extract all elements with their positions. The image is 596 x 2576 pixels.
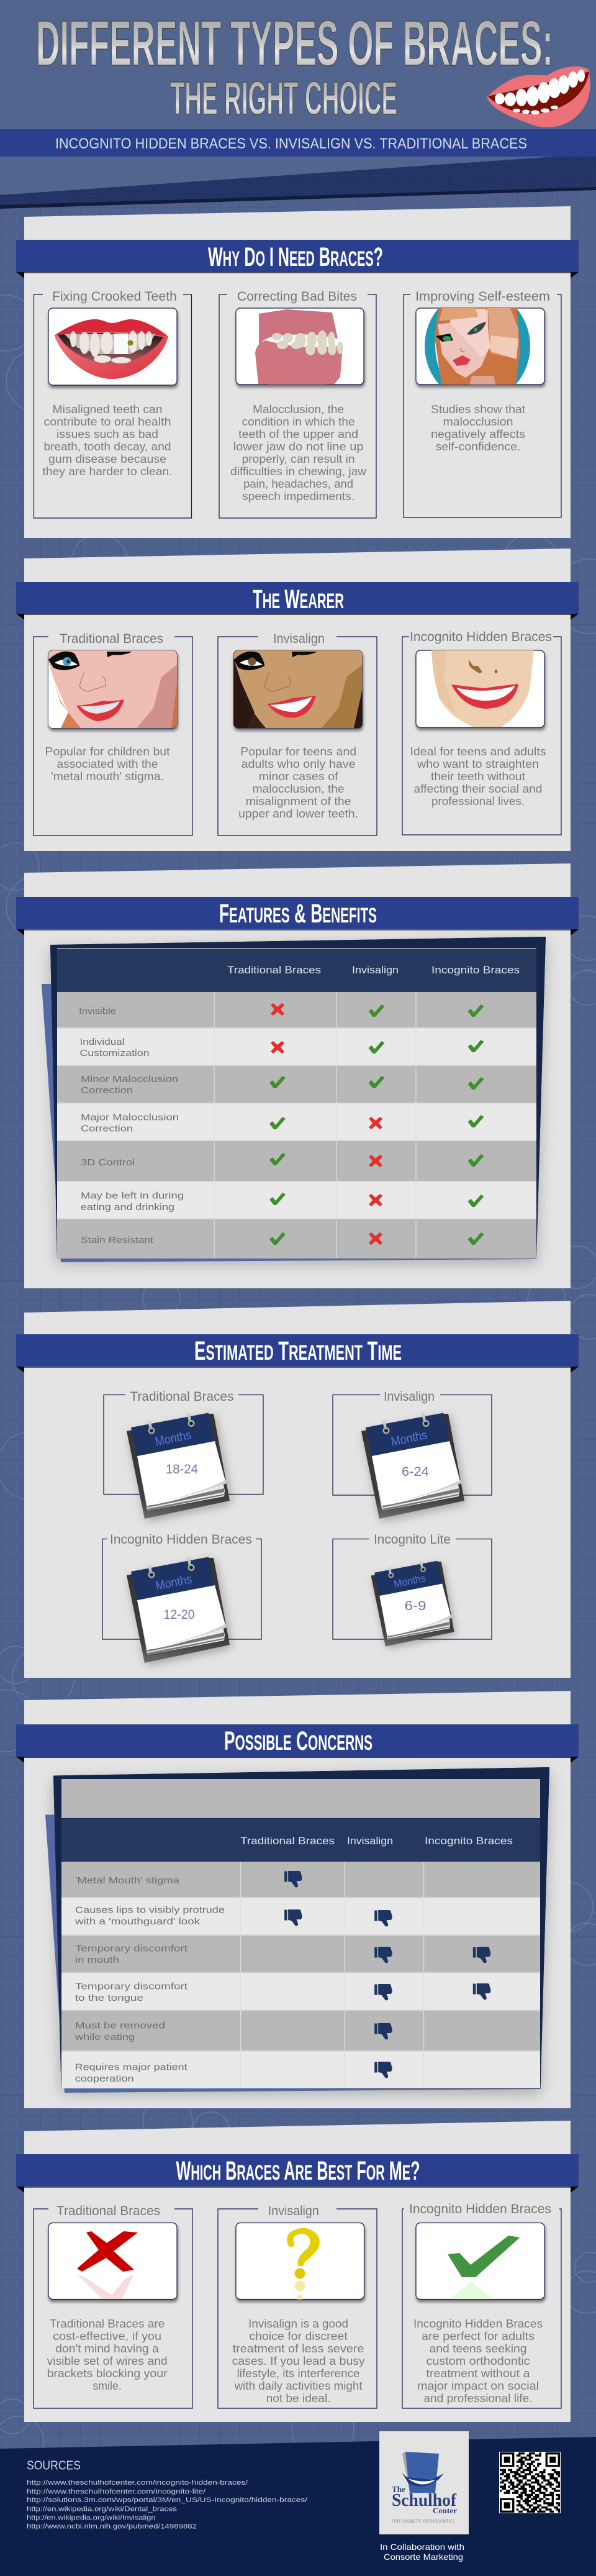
icon: yellow question mark: [287, 2228, 320, 2300]
timeframe: incognito hidden braces: 12-20: [164, 1608, 195, 1622]
title: [36, 7, 553, 124]
comparison table: concerns: Must be removed: [75, 2021, 165, 2031]
recommendation: traditional braces: [34, 2204, 192, 2408]
logo: the schulhof center: The: [392, 2485, 405, 2495]
logo: the schulhof center: FOR COSMETIC ORTHODONTICS: [392, 2518, 455, 2524]
card: fixing crooked teeth: issues such as bad: [56, 428, 158, 440]
comparison table: features: Traditional Braces: [227, 964, 321, 976]
comparison table: features: [42, 937, 546, 1262]
card: traditional braces wearer: 'metal mouth' stigma.: [51, 770, 164, 783]
card: incognito hidden braces wearer: professional lives.: [431, 795, 525, 808]
card: improving self-esteem: Improving Self-esteem: [415, 289, 550, 304]
card: incognito hidden braces wearer: Ideal for teens and adults: [410, 745, 546, 758]
heading ribbon: estimated treatment time: ESTIMATED TREATMENT TIME: [194, 1336, 402, 1366]
card: fixing crooked teeth: they are harder to clean.: [42, 465, 173, 478]
card: correcting bad bites: properly, can result in: [242, 453, 355, 465]
card: invisalign wearer: misalignment of the: [246, 795, 351, 808]
logo: the schulhof center: [379, 2431, 469, 2534]
card: traditional braces wearer: Popular for children but: [45, 745, 170, 758]
heading ribbon: why do I need braces: [16, 240, 579, 278]
comparison table: features: Correction: [81, 1123, 133, 1134]
card: incognito hidden braces wearer: who want to straighten: [417, 758, 539, 770]
sources: http://www.theschulhofcenter.com/incognito-hidden-braces/: [27, 2479, 248, 2487]
sources: http://solutions.3m.com/wps/portal/3M/en_US/US-Incognito/hidden-braces/: [27, 2496, 308, 2504]
comparison table: features: Correction: [81, 1085, 133, 1096]
sources: http://www.theschulhofcenter.com/incognito-lite/: [27, 2488, 206, 2496]
timeframe: incognito lite: Months: [393, 1572, 427, 1590]
icon: green check: [448, 2236, 520, 2299]
illustration: woman with metal braces: [48, 650, 177, 728]
subtitle band: INCOGNITO HIDDEN BRACES VS. INVISALIGN VS. TRADITIONAL BRACES: [55, 135, 527, 152]
comparison table: concerns: Causes lips to visibly protrude: [75, 1905, 225, 1916]
timeframe: incognito hidden braces: Incognito Hidden Braces: [110, 1532, 252, 1547]
card: invisalign wearer: Popular for teens and: [240, 745, 356, 758]
recommendation: incognito hidden braces: are perfect for adults: [422, 2330, 535, 2342]
recommendation: traditional braces: brackets blocking your: [47, 2367, 168, 2380]
comparison table: concerns: to the tongue: [75, 1993, 143, 2003]
heading ribbon: possible concerns: [16, 1724, 579, 1763]
card: improving self-esteem: negatively affects: [431, 428, 525, 440]
card: correcting bad bites: lower jaw do not line up: [233, 440, 364, 453]
heading ribbon: why do I need braces: WHY DO I NEED BRACES?: [208, 242, 383, 272]
sources: SOURCES: [27, 2459, 81, 2472]
recommendation: traditional braces: cost-effective, if you: [53, 2330, 161, 2342]
card: invisalign wearer: adults who only have: [242, 758, 356, 770]
card: improving self-esteem: Studies show that: [431, 403, 525, 416]
card: improving self-esteem: self-confidence.: [436, 440, 520, 453]
panel: features and benefits: [16, 863, 579, 1288]
timeframe: traditional braces: [104, 1390, 263, 1519]
recommendation: incognito hidden braces: and teens seeking: [430, 2342, 526, 2355]
timeframe: traditional braces: Months: [154, 1428, 192, 1449]
comparison table: features: 3D Control: [81, 1157, 135, 1168]
card: improving self-esteem: [404, 289, 561, 517]
card: fixing crooked teeth: Misaligned teeth can: [52, 403, 163, 416]
subtitle band: [0, 129, 596, 157]
timeframe: incognito lite: Incognito Lite: [374, 1532, 451, 1547]
recommendation: incognito hidden braces: and professional life.: [423, 2392, 533, 2405]
heading ribbon: features and benefits: [16, 897, 579, 935]
timeframe: invisalign: Invisalign: [384, 1390, 435, 1404]
illustration: lips with crooked teeth: [55, 319, 168, 379]
comparison table: concerns: cooperation: [75, 2073, 134, 2084]
comparison table: features: Individual: [79, 1037, 124, 1047]
comparison table: features: Minor Malocclusion: [81, 1074, 178, 1085]
card: invisalign wearer: Invisalign: [273, 632, 325, 646]
card: improving self-esteem: malocclusion: [443, 416, 513, 428]
comparison table: concerns: 'Metal Mouth' stigma: [75, 1875, 180, 1886]
panel: which braces are best for me: [16, 2121, 579, 2422]
recommendation: incognito hidden braces: custom orthodontic: [426, 2355, 530, 2367]
card: fixing crooked teeth: gum disease because: [48, 453, 166, 465]
recommendation: traditional braces: Traditional Braces are: [50, 2318, 165, 2330]
sources: [27, 2459, 308, 2531]
comparison table: concerns: in mouth: [75, 1955, 119, 1965]
footer background: [0, 2437, 596, 2576]
card: incognito hidden braces wearer: [402, 630, 561, 835]
collaboration credit: [380, 2542, 464, 2562]
comparison table: features: Customization: [79, 1048, 149, 1058]
card: correcting bad bites: pain, headaches, and: [243, 478, 353, 490]
recommendation: invisalign: not be ideal.: [266, 2392, 331, 2405]
illustration: woman looking in mirror: [425, 308, 530, 385]
comparison table: concerns: Incognito Braces: [425, 1835, 513, 1847]
panel: possible concerns: [16, 1691, 579, 2108]
card: invisalign wearer: [218, 632, 377, 835]
recommendation: invisalign: choice for discreet: [249, 2330, 348, 2342]
comparison table: concerns: Temporary discomfort: [75, 1943, 188, 1954]
comparison table: concerns: Invisalign: [347, 1835, 393, 1847]
logo: the schulhof center: Center: [433, 2506, 457, 2515]
icon: smiling mouth: [487, 66, 590, 127]
recommendation: incognito hidden braces: Incognito Hidden Braces: [413, 2318, 543, 2330]
timeframe: incognito hidden braces: [102, 1532, 261, 1663]
heading ribbon: features and benefits: FEATURES & BENEFITS: [219, 899, 377, 929]
recommendation: traditional braces: visible set of wires and: [47, 2355, 168, 2367]
card: correcting bad bites: [219, 289, 376, 518]
recommendation: incognito hidden braces: [402, 2202, 561, 2408]
timeframe: incognito lite: [333, 1532, 492, 1647]
sources: http://www.ncbi.nlm.nih.gov/pubmed/14989882: [27, 2523, 197, 2531]
card: invisalign wearer: malocclusion, the: [253, 783, 345, 795]
card: incognito hidden braces wearer: Incognito Hidden Braces: [410, 630, 552, 644]
recommendation: invisalign: Invisalign: [268, 2204, 319, 2218]
card: fixing crooked teeth: contribute to oral health: [43, 416, 171, 428]
timeframe: traditional braces: 18-24: [166, 1462, 198, 1477]
comparison table: concerns: Requires major patient: [75, 2062, 188, 2072]
comparison table: features: Invisalign: [352, 964, 399, 976]
heading ribbon: which braces are best: [16, 2154, 579, 2193]
card: correcting bad bites: Correcting Bad Bites: [237, 289, 357, 304]
recommendation: incognito hidden braces: treatment without a: [426, 2367, 531, 2380]
sources: http://en.wikipedia.org/wiki/Dental_braces: [27, 2506, 178, 2513]
illustration: dental model with malocclusion: [255, 309, 343, 385]
heading ribbon: which braces are best: WHICH BRACES ARE BEST FOR ME?: [176, 2156, 420, 2186]
illustration: smile with hidden braces: [431, 650, 534, 727]
logo: the schulhof center: Schulhof: [392, 2490, 456, 2510]
panel: the wearer: [16, 548, 579, 851]
comparison table: features: Stain Resistant: [81, 1235, 154, 1245]
comparison table: features: May be left in during: [81, 1190, 184, 1201]
recommendation: invisalign: cases. If you lead a busy: [232, 2355, 365, 2367]
collaboration credit: In Collaboration with: [380, 2542, 464, 2552]
recommendation: invisalign: Invisalign is a good: [248, 2318, 348, 2330]
recommendation: traditional braces: don't mind having a: [55, 2342, 160, 2355]
comparison table: concerns: Traditional Braces: [240, 1835, 335, 1847]
card: invisalign wearer: upper and lower teeth.: [238, 808, 358, 820]
timeframe: invisalign: [333, 1390, 492, 1519]
comparison table: features: eating and drinking: [81, 1202, 174, 1213]
comparison table: features: Invisible: [79, 1006, 116, 1016]
recommendation: invisalign: lifestyle, its interference: [237, 2367, 360, 2380]
heading ribbon: estimated treatment time: [16, 1334, 579, 1373]
recommendation: traditional braces: Traditional Braces: [56, 2204, 160, 2218]
card: fixing crooked teeth: Fixing Crooked Teeth: [52, 289, 177, 304]
timeframe: traditional braces: Traditional Braces: [130, 1390, 233, 1404]
comparison table: concerns: with a 'mouthguard' look: [74, 1916, 201, 1927]
card: incognito hidden braces wearer: their teeth without: [431, 770, 525, 783]
timeframe: invisalign: Months: [390, 1428, 428, 1449]
illustration: woman with clear aligners: [233, 650, 363, 728]
card: traditional braces wearer: Traditional Braces: [60, 632, 163, 646]
card: traditional braces wearer: [34, 632, 192, 835]
recommendation: invisalign: with daily activities might: [234, 2380, 363, 2392]
recommendation: incognito hidden braces: Incognito Hidden Braces: [409, 2202, 551, 2216]
card: fixing crooked teeth: [34, 289, 191, 518]
QR code: [499, 2452, 561, 2513]
card: correcting bad bites: speech impediments.: [242, 490, 354, 503]
icon: red cross: [77, 2231, 138, 2299]
timeframe: incognito hidden braces: Months: [155, 1572, 193, 1593]
timeframe: invisalign: 6-24: [402, 1465, 429, 1479]
comparison table: features: Major Malocclusion: [81, 1112, 179, 1123]
card: correcting bad bites: condition in which the: [242, 416, 355, 428]
comparison table: concerns: Temporary discomfort: [75, 1982, 188, 1992]
collaboration credit: Consorte Marketing: [384, 2552, 463, 2562]
recommendation: traditional braces: smile.: [93, 2380, 122, 2392]
sources: http://en.wikipedia.org/wiki/Invisalign: [27, 2515, 155, 2522]
heading ribbon: possible concerns: POSSIBLE CONCERNS: [224, 1726, 372, 1756]
card: incognito hidden braces wearer: affecting their social and: [413, 783, 543, 795]
card: fixing crooked teeth: breath, tooth decay, and: [43, 440, 171, 453]
recommendation: incognito hidden braces: major impact on social: [417, 2380, 539, 2392]
card: correcting bad bites: difficulties in chewing, jaw: [230, 465, 367, 478]
panel: estimated treatment time: [16, 1301, 579, 1678]
card: correcting bad bites: Malocclusion, the: [253, 403, 344, 416]
comparison table: features: Incognito Braces: [431, 964, 520, 976]
timeframe: incognito lite: 6-9: [405, 1599, 426, 1613]
card: invisalign wearer: minor cases of: [259, 770, 339, 783]
header background with diagonal band: [0, 0, 596, 209]
panel: why do I need braces: [16, 206, 579, 538]
comparison table: concerns: [45, 1767, 549, 2093]
heading ribbon: the wearer: THE WEARER: [253, 585, 344, 614]
card: correcting bad bites: teeth of the upper and: [238, 428, 358, 440]
recommendation: invisalign: treatment of less severe: [233, 2342, 364, 2355]
card: traditional braces wearer: associated with the: [57, 758, 158, 770]
comparison table: concerns: while eating: [74, 2032, 135, 2042]
heading ribbon: the wearer: [16, 582, 579, 620]
recommendation: invisalign: [218, 2204, 377, 2408]
